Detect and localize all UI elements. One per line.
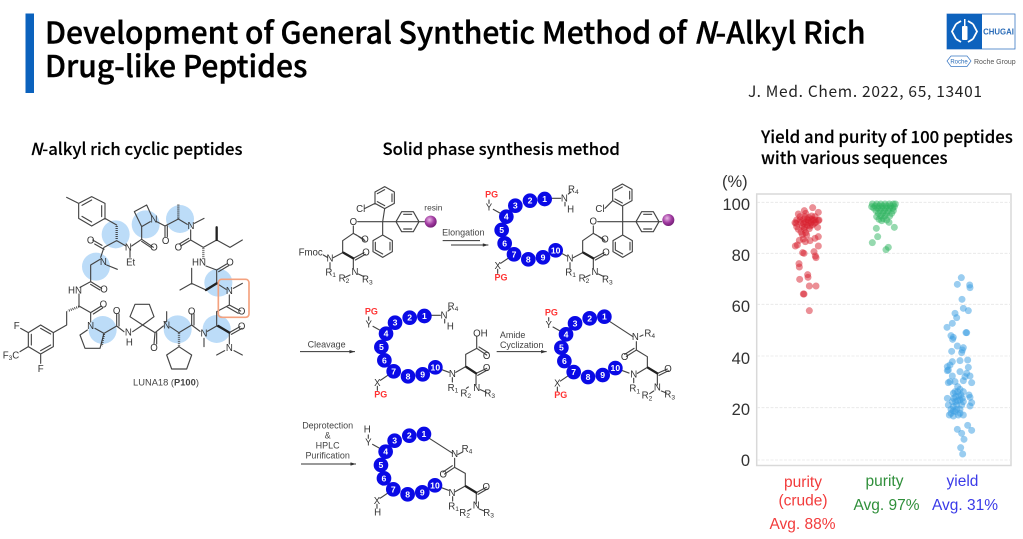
panel: cyclized protected peptide: 10 — [611, 363, 620, 373]
panel: cyclized protected peptide: N — [630, 370, 637, 381]
panel: elongated resin-bound chain: R — [568, 184, 579, 196]
panel: final deprotected cyclic peptide: 4 — [469, 449, 473, 456]
y axis labels: 40 — [732, 350, 750, 368]
panel: elongated resin-bound chain: R — [602, 275, 613, 286]
panel: starting resin reagent: N — [352, 267, 359, 278]
arrow: Deprotection and HPLC Purification — [301, 421, 356, 464]
panel: cyclized protected peptide: 2 — [587, 313, 592, 323]
panel: elongated resin-bound chain: X — [494, 261, 501, 272]
y axis labels: 100 — [722, 196, 750, 214]
arrow: Deprotection and HPLC Purification: Purification — [305, 450, 350, 460]
panel: cyclized protected peptide: 4 — [651, 333, 655, 340]
panel: starting resin reagent: 1 — [332, 272, 336, 279]
panel: LUNA18 structure: O — [100, 300, 108, 311]
arrow: Elongation — [442, 228, 488, 245]
panel: cyclized protected peptide: 6 — [562, 356, 567, 366]
heading: solid phase synthesis: Solid phase synthesis method — [382, 136, 620, 160]
panel: final deprotected cyclic peptide: O — [483, 482, 491, 493]
category label: crude purity: purity — [784, 474, 822, 491]
panel: cleaved linear peptide: O — [483, 351, 491, 362]
panel: elongated resin-bound chain: N — [592, 267, 599, 278]
arrow: Deprotection and HPLC Purification: Deprotection — [302, 421, 353, 431]
panel: elongated resin-bound chain: 2 — [528, 196, 533, 206]
panel: cyclized protected peptide: O — [664, 364, 672, 375]
panel: LUNA18 structure: N — [87, 321, 94, 332]
panel: LUNA18 structure: O — [238, 321, 246, 332]
panel: cleaved linear peptide: O — [483, 363, 491, 374]
panel: elongated resin-bound chain: 9 — [541, 252, 546, 262]
panel: cleaved linear peptide: 6 — [382, 355, 387, 365]
panel: LUNA18 structure: O — [175, 243, 183, 254]
panel: elongated resin-bound chain: R — [565, 267, 576, 279]
arrow: Cleavage — [300, 339, 355, 352]
panel: elongated resin-bound chain: 3 — [609, 279, 613, 286]
panel: starting resin reagent: R — [362, 275, 373, 286]
panel: LUNA18 structure: N — [188, 221, 195, 232]
panel: starting resin reagent: resin — [424, 203, 443, 213]
citation: J. Med. Chem. 2022, 65, 13401 — [748, 80, 982, 102]
category label: crude purity: (crude) — [778, 492, 828, 510]
panel: LUNA18 structure: O — [87, 235, 95, 246]
panel: LUNA18 structure: N — [151, 215, 158, 226]
panel: cyclized protected peptide: 3 — [671, 394, 675, 401]
panel: LUNA18 structure: O — [238, 306, 246, 317]
panel: cleaved linear peptide: Y — [365, 319, 372, 330]
panel: cleaved linear peptide: 1 — [422, 311, 427, 321]
panel: cleaved linear peptide: N — [473, 383, 480, 394]
panel: cyclized protected peptide: R — [642, 391, 653, 402]
y axis labels: 20 — [732, 401, 750, 419]
chart: yield and purity scatter — [722, 173, 1011, 533]
panel: cyclized protected peptide: N — [654, 382, 661, 393]
panel: LUNA18 structure: F — [38, 364, 44, 375]
panel: LUNA18 structure: N — [201, 329, 208, 340]
panel: final deprotected cyclic peptide: 3 — [490, 513, 494, 520]
panel: cyclized protected peptide: 3 — [573, 318, 578, 328]
panel: final deprotected cyclic peptide: N — [473, 501, 480, 512]
panel: cyclized protected peptide: R — [644, 328, 655, 340]
panel: LUNA18 structure: F — [3, 350, 19, 362]
arrow: Amide Cyclization — [497, 330, 547, 352]
panel: elongated resin-bound chain: R — [579, 273, 590, 285]
arrow: Elongation: Elongation — [442, 228, 485, 238]
panel: LUNA18 structure: N — [125, 328, 132, 339]
category label: crude purity: Avg. 88% — [769, 516, 836, 533]
panel: LUNA18 structure: O — [100, 285, 108, 296]
heading: yield and purity: with various sequences — [761, 145, 948, 169]
title: Development of General Synthetic Method of N-Alkyl Rich — [45, 8, 866, 52]
panel: final deprotected cyclic peptide: H — [374, 508, 381, 519]
heading: yield and purity: Yield and purity of 100 peptides — [760, 124, 1013, 148]
panel: starting resin reagent: Fmoc — [299, 247, 323, 258]
panel: LUNA18 structure: O — [113, 306, 121, 317]
panel: LUNA18 structure: O — [162, 236, 170, 247]
panel: starting resin reagent: N — [327, 253, 334, 264]
panel: cleaved linear peptide: OH — [473, 329, 488, 340]
panel: cleaved linear peptide: R — [448, 301, 459, 313]
panel: starting resin reagent: R — [325, 267, 336, 279]
panel: cleaved linear peptide: 2 — [407, 313, 412, 323]
category label: purity: Avg. 97% — [853, 497, 920, 514]
panel: final deprotected cyclic peptide: 5 — [379, 460, 384, 470]
panel: LUNA18 structure: O — [150, 243, 158, 254]
panel: cyclized protected peptide: N — [632, 332, 639, 343]
panel: cleaved linear peptide: 1 — [455, 388, 459, 395]
panel: cleaved linear peptide: R — [484, 388, 495, 400]
panel: final deprotected cyclic peptide: O — [440, 470, 448, 481]
panel: LUNA18 structure: N — [125, 243, 132, 254]
title — [45, 8, 866, 86]
panel: cleaved linear peptide — [365, 301, 495, 400]
panel: elongated resin-bound chain: 7 — [512, 249, 517, 259]
panel: LUNA18 structure: F — [14, 321, 20, 332]
y axis labels: 0 — [741, 452, 750, 470]
category label: yield: Avg. 31% — [932, 497, 998, 514]
panel: final deprotected cyclic peptide: N — [448, 488, 455, 499]
panel: LUNA18 structure: O — [226, 257, 234, 268]
panel: final deprotected cyclic peptide: H — [364, 424, 371, 435]
panel: final deprotected cyclic peptide: 1 — [455, 506, 459, 513]
panel: cyclized protected peptide — [545, 307, 675, 402]
panel: final deprotected cyclic peptide: R — [448, 501, 459, 513]
panel: LUNA18 structure: LUNA18 (P100) — [133, 377, 199, 387]
panel: final deprotected cyclic peptide: 4 — [383, 447, 388, 457]
panel: LUNA18 structure: N — [226, 343, 233, 354]
panel: cyclized protected peptide: R — [629, 384, 640, 395]
panel: cleaved linear peptide: R — [448, 383, 459, 395]
panel: elongated resin-bound chain: N — [561, 193, 568, 204]
panel: cleaved linear peptide: 3 — [491, 393, 495, 400]
panel: elongated resin-bound chain: N — [567, 253, 574, 264]
dots: yield — [943, 274, 975, 457]
panel: LUNA18 structure: O — [188, 306, 196, 317]
panel: cleaved linear peptide: N — [449, 369, 456, 380]
panel: cleaved linear peptide: PG — [365, 307, 378, 317]
panel: LUNA18 structure: N — [163, 321, 170, 332]
panel: elongated resin-bound chain: 1 — [572, 272, 576, 279]
panel: LUNA18 structure: N — [226, 286, 233, 297]
category label: yield: yield — [947, 473, 978, 490]
panel: final deprotected cyclic peptide: 8 — [405, 489, 410, 499]
panel: elongated resin-bound chain — [485, 184, 674, 286]
panel: final deprotected cyclic peptide: 1 — [422, 429, 427, 439]
panel: cyclized protected peptide: 1 — [602, 312, 607, 322]
panel: LUNA18 structure: O — [150, 343, 158, 354]
panel: starting resin reagent: O — [350, 217, 358, 228]
category label: purity: purity — [866, 473, 904, 490]
panel: final deprotected cyclic peptide: N — [451, 449, 458, 460]
panel: elongated resin-bound chain: 10 — [551, 245, 561, 255]
panel: starting resin reagent: 2 — [346, 278, 350, 285]
panel: elongated resin-bound chain: O — [590, 216, 598, 227]
panel: cleaved linear peptide: 9 — [420, 369, 425, 379]
logo: Chugai Roche: Roche Group — [974, 59, 1016, 66]
panel: cyclized protected peptide: O — [621, 352, 629, 363]
panel: cyclized protected peptide: PG — [554, 390, 567, 400]
panel: cleaved linear peptide: PG — [374, 389, 387, 399]
dots: purity — [868, 200, 899, 253]
panel: cleaved linear peptide: 7 — [391, 366, 396, 376]
y axis labels: 80 — [732, 247, 750, 265]
panel: LUNA18 structure: Et — [126, 258, 136, 269]
panel: elongated resin-bound chain: 4 — [575, 189, 579, 196]
arrow: Cleavage: Cleavage — [308, 339, 346, 349]
panel: LUNA18 structure: 3 — [9, 355, 13, 362]
panel: starting resin reagent: 3 — [369, 279, 373, 286]
panel: elongated resin-bound chain: 4 — [504, 212, 509, 222]
panel: elongated resin-bound chain: O — [602, 248, 610, 259]
panel: cleaved linear peptide: 5 — [379, 342, 384, 352]
panel: elongated resin-bound chain: 1 — [542, 194, 547, 204]
panel: elongated resin-bound chain: O — [601, 235, 609, 246]
panel: final deprotected cyclic peptide: 9 — [420, 487, 425, 497]
panel: final deprotected cyclic peptide: X — [374, 496, 381, 507]
panel: final deprotected cyclic peptide: R — [462, 444, 473, 456]
panel: LUNA18 structure: N — [100, 257, 107, 268]
dots: crude purity — [791, 204, 822, 314]
panel: cyclized protected peptide: R — [664, 390, 675, 401]
y axis labels: (%) — [722, 173, 748, 191]
panel: cleaved linear peptide: 4 — [455, 306, 459, 313]
panel: cleaved linear peptide: H — [447, 321, 454, 332]
panel: LUNA18 structure: H — [126, 337, 133, 348]
panel: LUNA18 structure — [3, 197, 249, 387]
panel: elongated resin-bound chain: 3 — [513, 201, 518, 211]
panel: starting resin reagent: Cl — [356, 204, 365, 215]
panel: cyclized protected peptide: Y — [545, 320, 552, 331]
panel: final deprotected cyclic peptide: Y — [365, 437, 372, 448]
panel: elongated resin-bound chain: 2 — [586, 278, 590, 285]
panel: cyclized protected peptide: PG — [545, 307, 558, 317]
panel: final deprotected cyclic peptide — [364, 424, 494, 520]
panel: final deprotected cyclic peptide: R — [483, 508, 494, 520]
y axis labels: 60 — [732, 298, 750, 316]
panel: cleaved linear peptide: 4 — [384, 329, 389, 339]
panel: cleaved linear peptide: 3 — [393, 318, 398, 328]
panel: cleaved linear peptide: X — [374, 378, 381, 389]
panel: LUNA18 structure: C — [12, 350, 19, 361]
panel: elongated resin-bound chain: Y — [486, 202, 493, 213]
panel: LUNA18 structure: HN — [68, 285, 82, 296]
heading: cyclic peptides: N-alkyl rich cyclic peptides — [30, 136, 243, 160]
panel: elongated resin-bound chain: H — [567, 204, 574, 215]
panel: cyclized protected peptide: 8 — [586, 372, 591, 382]
panel: cleaved linear peptide: R — [460, 388, 471, 400]
panel: cyclized protected peptide: 1 — [636, 388, 640, 395]
panel: starting resin reagent: R — [339, 273, 350, 285]
panel: cyclized protected peptide: 4 — [564, 329, 569, 339]
panel: cleaved linear peptide: N — [441, 310, 448, 321]
panel: cyclized protected peptide: 5 — [559, 343, 564, 353]
panel: starting resin reagent: O — [361, 235, 369, 246]
panel: cyclized protected peptide: 2 — [649, 395, 653, 402]
panel: cleaved linear peptide: 2 — [467, 393, 471, 400]
panel: cyclized protected peptide: X — [554, 379, 561, 390]
panel: cyclized protected peptide: 7 — [571, 367, 576, 377]
heading: yield and purity — [760, 124, 1013, 169]
panel: final deprotected cyclic peptide: 7 — [391, 484, 396, 494]
panel: cleaved linear peptide: 8 — [406, 371, 411, 381]
arrow: Amide Cyclization: Cyclization — [500, 340, 543, 350]
panel: starting resin reagent: O — [362, 248, 370, 259]
panel: cleaved linear peptide: 10 — [431, 362, 440, 372]
logo: Chugai Roche: Roche — [950, 60, 968, 66]
panel: elongated resin-bound chain: PG — [485, 190, 498, 200]
panel: final deprotected cyclic peptide: 2 — [466, 513, 470, 520]
title: Drug-like Peptides — [45, 42, 307, 86]
panel: final deprotected cyclic peptide: 6 — [382, 473, 387, 483]
panel: cyclized protected peptide: 9 — [600, 370, 605, 380]
arrow: Amide Cyclization: Amide — [500, 330, 525, 340]
panel: elongated resin-bound chain: 6 — [502, 238, 507, 248]
y axis labels — [722, 173, 750, 470]
panel: final deprotected cyclic peptide: R — [459, 508, 470, 520]
arrow: Deprotection and HPLC Purification: HPLC — [316, 441, 340, 451]
title accent bar — [26, 14, 34, 93]
panel: final deprotected cyclic peptide: 10 — [430, 480, 440, 490]
panel: final deprotected cyclic peptide: 3 — [392, 436, 397, 446]
panel: starting resin reagent — [299, 187, 443, 286]
panel: elongated resin-bound chain: PG — [495, 272, 507, 282]
logo: Chugai Roche: CHUGAI — [983, 28, 1014, 36]
panel: final deprotected cyclic peptide: 2 — [407, 431, 412, 441]
panel: LUNA18 structure: HN — [192, 257, 206, 268]
panel: elongated resin-bound chain: 8 — [526, 254, 531, 264]
panel: elongated resin-bound chain: 5 — [499, 225, 504, 235]
panel: elongated resin-bound chain: Cl — [595, 204, 605, 215]
logo: Chugai Roche — [947, 14, 1016, 66]
arrow: Deprotection and HPLC Purification: & — [325, 431, 331, 441]
